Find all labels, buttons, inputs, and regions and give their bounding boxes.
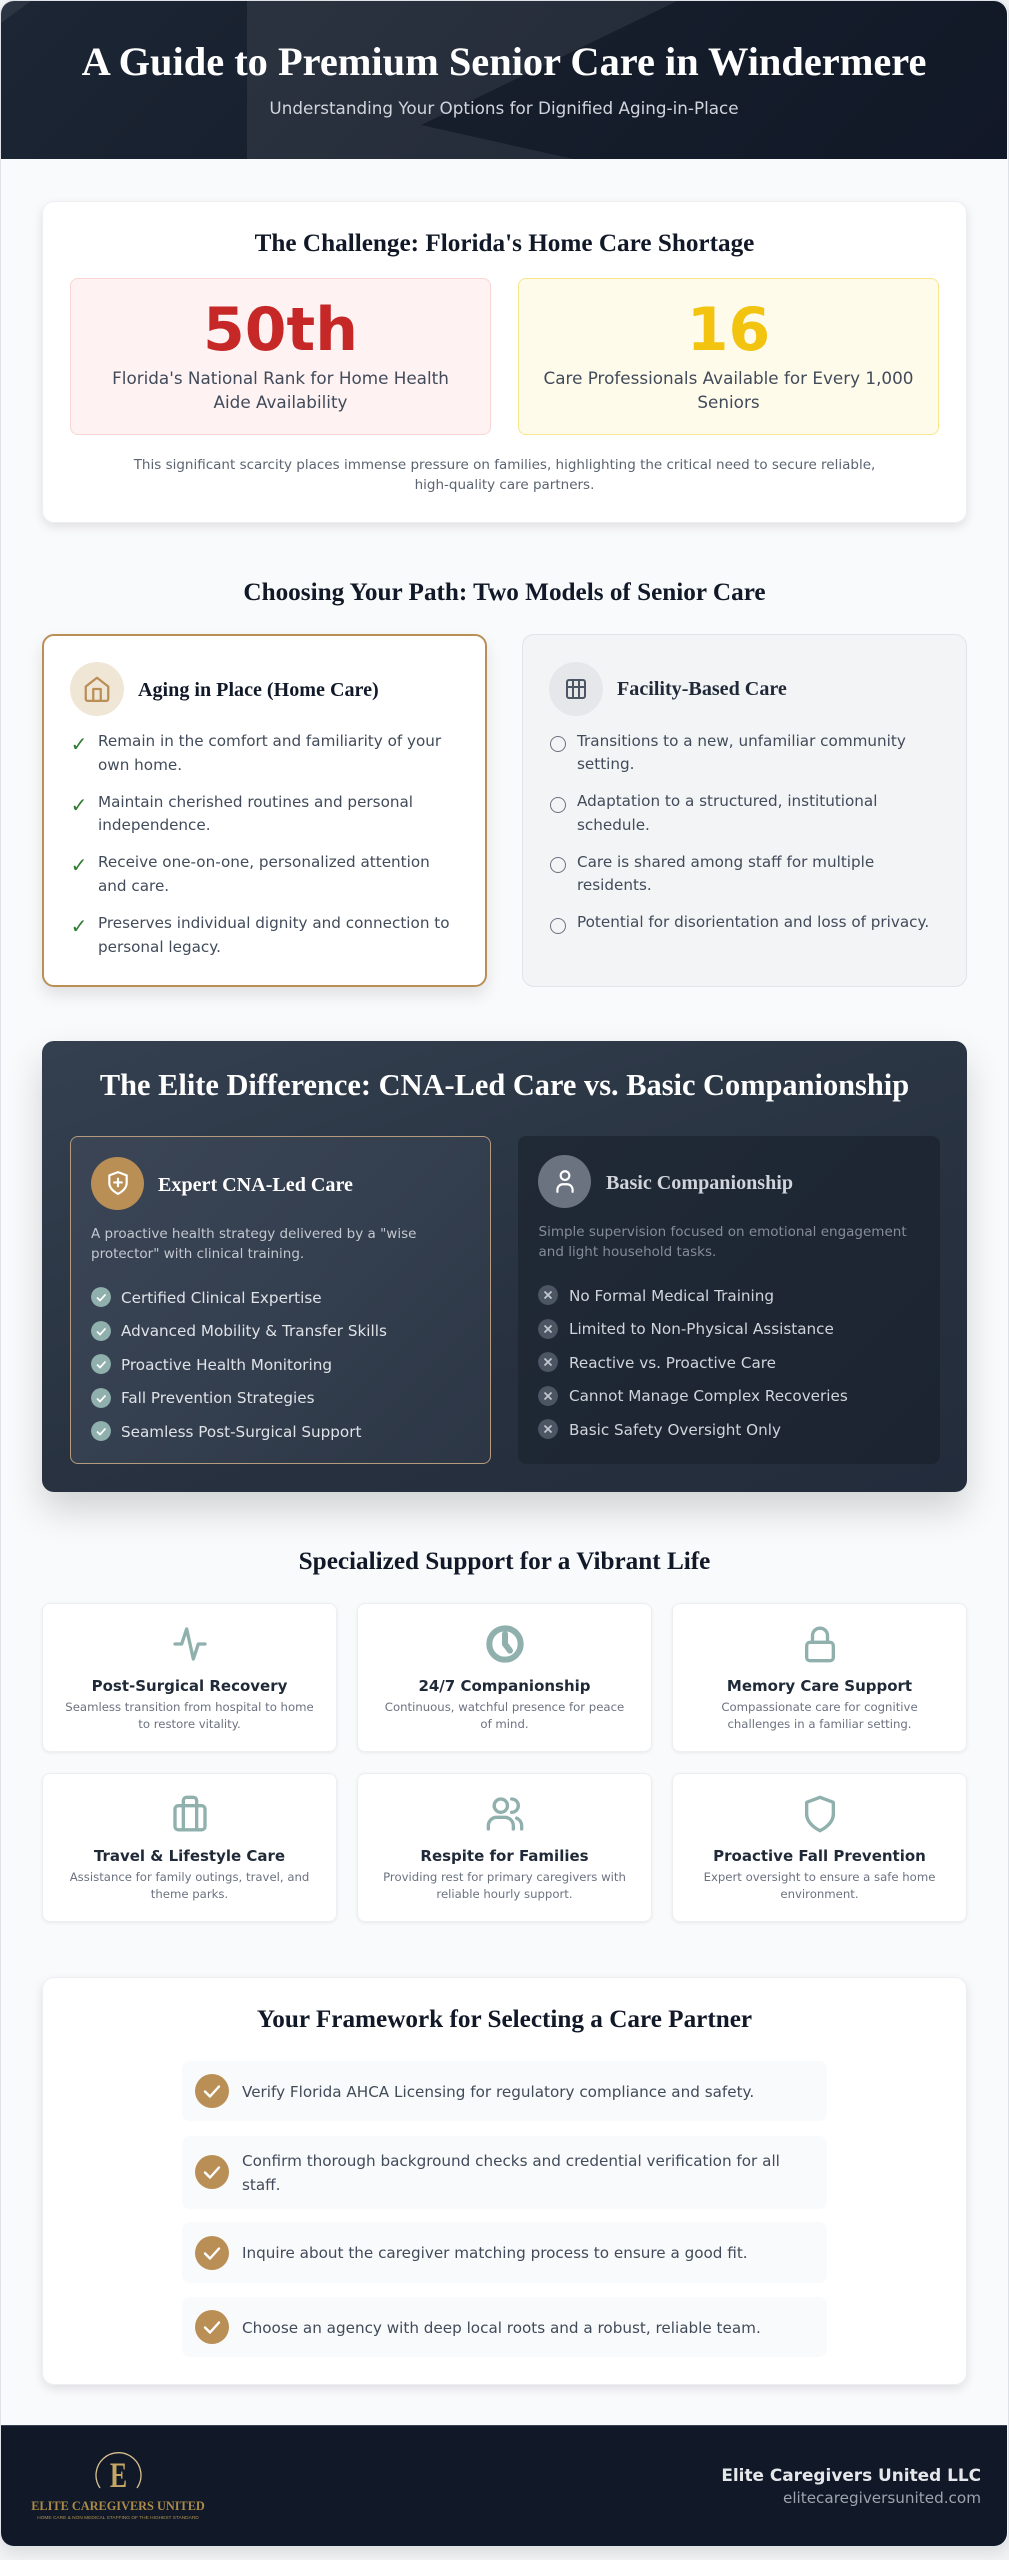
limitations list: Reactive vs. Proactive Care xyxy=(569,1354,776,1372)
limitations list: No Formal Medical Training xyxy=(569,1286,774,1304)
card: travel and lifestyle care: Travel & Lifestyle Care xyxy=(94,1847,285,1865)
card: proactive fall prevention: Proactive Fall Prevention xyxy=(713,1847,926,1865)
card: post-surgical recovery: to restore vitality. xyxy=(138,1716,241,1730)
card: post-surgical recovery xyxy=(42,1603,337,1752)
stat: 16: Seniors xyxy=(697,392,760,412)
note text: This significant scarcity places immense pressure on families, highlighting the critical need to secure reliable, xyxy=(134,457,875,473)
panel: facility-based care xyxy=(522,634,967,987)
drawbacks list: Potential for disorientation and loss of privacy. xyxy=(577,913,929,931)
icon: medical shield xyxy=(91,1157,144,1210)
card: respite for families: Providing rest for primary caregivers with xyxy=(383,1870,626,1884)
logo xyxy=(31,2452,205,2521)
benefits list: Preserves individual dignity and connection to xyxy=(98,914,450,932)
heading: aging in place: Aging in Place (Home Care) xyxy=(138,679,379,701)
card: 24/7 companionship: 24/7 Companionship xyxy=(418,1677,591,1695)
panel: basic companionship xyxy=(518,1136,940,1464)
heading: expert care: Expert CNA-Led Care xyxy=(158,1174,353,1196)
step: matching process xyxy=(182,2222,827,2283)
feature list: Advanced Mobility & Transfer Skills xyxy=(121,1322,387,1340)
description: Simple supervision focused on emotional engagement xyxy=(538,1224,907,1240)
benefits list: own home. xyxy=(98,756,182,774)
card: post-surgical recovery: Post-Surgical Recovery xyxy=(92,1677,287,1695)
heading: elite difference: The Elite Difference: CNA-Led Care vs. Basic Companionship xyxy=(100,1068,909,1102)
feature list: Fall Prevention Strategies xyxy=(121,1389,314,1407)
heading: basic companionship: Basic Companionship xyxy=(606,1172,793,1194)
card: memory care support: Memory Care Support xyxy=(727,1677,912,1695)
website: elitecaregiversunited.com xyxy=(783,2489,981,2507)
card: memory care support: Compassionate care for cognitive xyxy=(721,1700,918,1714)
panel: selection framework xyxy=(42,1977,967,2385)
card: travel and lifestyle care: Assistance for family outings, travel, and xyxy=(70,1870,309,1884)
feature list xyxy=(91,1287,387,1441)
step: matching process: Inquire about the caregiver matching process to ensure a good fit. xyxy=(242,2244,748,2262)
stat: 50th: 50th xyxy=(203,295,358,365)
title: A Guide to Premium Senior Care in Windermere xyxy=(82,39,926,84)
step: local roots: Choose an agency with deep local roots and a robust, reliable team. xyxy=(242,2318,761,2336)
step: licensing xyxy=(182,2061,827,2121)
stat: 50th xyxy=(70,278,491,435)
drawbacks list: Care is shared among staff for multiple xyxy=(577,853,874,871)
logo: HOME CARE & NON MEDICAL STAFFING OF THE HIGHEST STANDARD xyxy=(37,2515,199,2521)
drawbacks list xyxy=(550,732,929,934)
card: proactive fall prevention xyxy=(672,1773,967,1922)
step: background checks: staff. xyxy=(242,2176,280,2194)
company name: Elite Caregivers United LLC xyxy=(721,2465,981,2485)
subtitle: Understanding Your Options for Dignified Aging-in-Place xyxy=(269,98,739,118)
benefits list: Remain in the comfort and familiarity of your xyxy=(98,732,441,750)
benefits list: Maintain cherished routines and personal xyxy=(98,793,413,811)
drawbacks list: Adaptation to a structured, institutional xyxy=(577,792,877,810)
card: memory care support xyxy=(672,1603,967,1752)
description: A proactive health strategy delivered by a "wise xyxy=(91,1226,416,1242)
limitations list xyxy=(538,1285,848,1439)
card: respite for families: reliable hourly support. xyxy=(436,1886,573,1900)
drawbacks list: setting. xyxy=(577,755,634,773)
benefits list: ✓ xyxy=(71,793,87,817)
card: respite for families: Respite for Families xyxy=(420,1847,589,1865)
note text xyxy=(134,457,875,493)
heading: challenge: The Challenge: Florida's Home Care Shortage xyxy=(255,230,754,257)
feature list: Proactive Health Monitoring xyxy=(121,1356,332,1374)
benefits list: and care. xyxy=(98,877,169,895)
feature list: Certified Clinical Expertise xyxy=(121,1288,322,1306)
benefits list: Receive one-on-one, personalized attention xyxy=(98,853,430,871)
heading: facility-based care: Facility-Based Care xyxy=(617,678,787,700)
feature list: Seamless Post-Surgical Support xyxy=(121,1423,361,1441)
card: proactive fall prevention: environment. xyxy=(780,1886,859,1900)
drawbacks list: Transitions to a new, unfamiliar community xyxy=(577,732,906,750)
benefits list: ✓ xyxy=(71,914,87,938)
stat: 16 xyxy=(518,278,939,435)
stat: 16: 16 xyxy=(687,295,770,365)
card: 24/7 companionship: Continuous, watchful presence for peace xyxy=(385,1700,624,1714)
benefits list xyxy=(71,732,450,956)
card: memory care support: challenges in a familiar setting. xyxy=(727,1716,912,1730)
stat: 16: Care Professionals Available for Every 1,000 xyxy=(544,368,913,388)
card: proactive fall prevention: Expert oversight to ensure a safe home xyxy=(704,1870,935,1884)
heading: specialized support: Specialized Support for a Vibrant Life xyxy=(299,1548,710,1574)
description xyxy=(91,1226,416,1262)
stat: 50th: Aide Availability xyxy=(214,392,347,412)
benefits list: ✓ xyxy=(71,853,87,877)
description: protector" with clinical training. xyxy=(91,1246,304,1262)
logo: E xyxy=(110,2455,127,2495)
drawbacks list: residents. xyxy=(577,876,652,894)
card: travel and lifestyle care xyxy=(42,1773,337,1922)
icon: building grid xyxy=(549,662,603,716)
panel: the challenge xyxy=(42,201,967,523)
card: respite for families xyxy=(357,1773,652,1922)
panel: aging in place xyxy=(42,634,487,987)
benefits list: personal legacy. xyxy=(98,938,221,956)
icon: person xyxy=(538,1155,591,1208)
limitations list: Limited to Non-Physical Assistance xyxy=(569,1320,834,1338)
card: post-surgical recovery: Seamless transition from hospital to home xyxy=(65,1700,314,1714)
note text: high-quality care partners. xyxy=(415,477,594,493)
benefits list: ✓ xyxy=(71,732,87,756)
step: background checks xyxy=(182,2136,827,2209)
limitations list: Basic Safety Oversight Only xyxy=(569,1421,781,1439)
drawbacks list: schedule. xyxy=(577,816,650,834)
panel: the elite difference xyxy=(42,1041,967,1492)
description xyxy=(538,1224,907,1260)
heading: choosing your path: Choosing Your Path: Two Models of Senior Care xyxy=(243,579,766,606)
stat: 50th: Florida's National Rank for Home Health xyxy=(112,368,449,388)
card: travel and lifestyle care: theme parks. xyxy=(151,1886,228,1900)
description: and light household tasks. xyxy=(538,1244,716,1260)
heading: framework: Your Framework for Selecting a Care Partner xyxy=(257,2006,752,2033)
panel: expert CNA-led care xyxy=(70,1136,491,1464)
footer xyxy=(1,2425,1007,2546)
card: 24/7 companionship xyxy=(357,1603,652,1752)
step: local roots xyxy=(182,2297,827,2357)
card: 24/7 companionship: of mind. xyxy=(480,1716,529,1730)
limitations list: Cannot Manage Complex Recoveries xyxy=(569,1387,848,1405)
logo: ELITE CAREGIVERS UNITED xyxy=(31,2499,205,2513)
benefits list: independence. xyxy=(98,816,211,834)
step: licensing: Verify Florida AHCA Licensing for regulatory compliance and safety. xyxy=(242,2083,754,2101)
icon: house xyxy=(70,662,124,716)
step: background checks: Confirm thorough background checks and credential verification for all xyxy=(242,2152,780,2170)
header banner xyxy=(1,1,1007,159)
